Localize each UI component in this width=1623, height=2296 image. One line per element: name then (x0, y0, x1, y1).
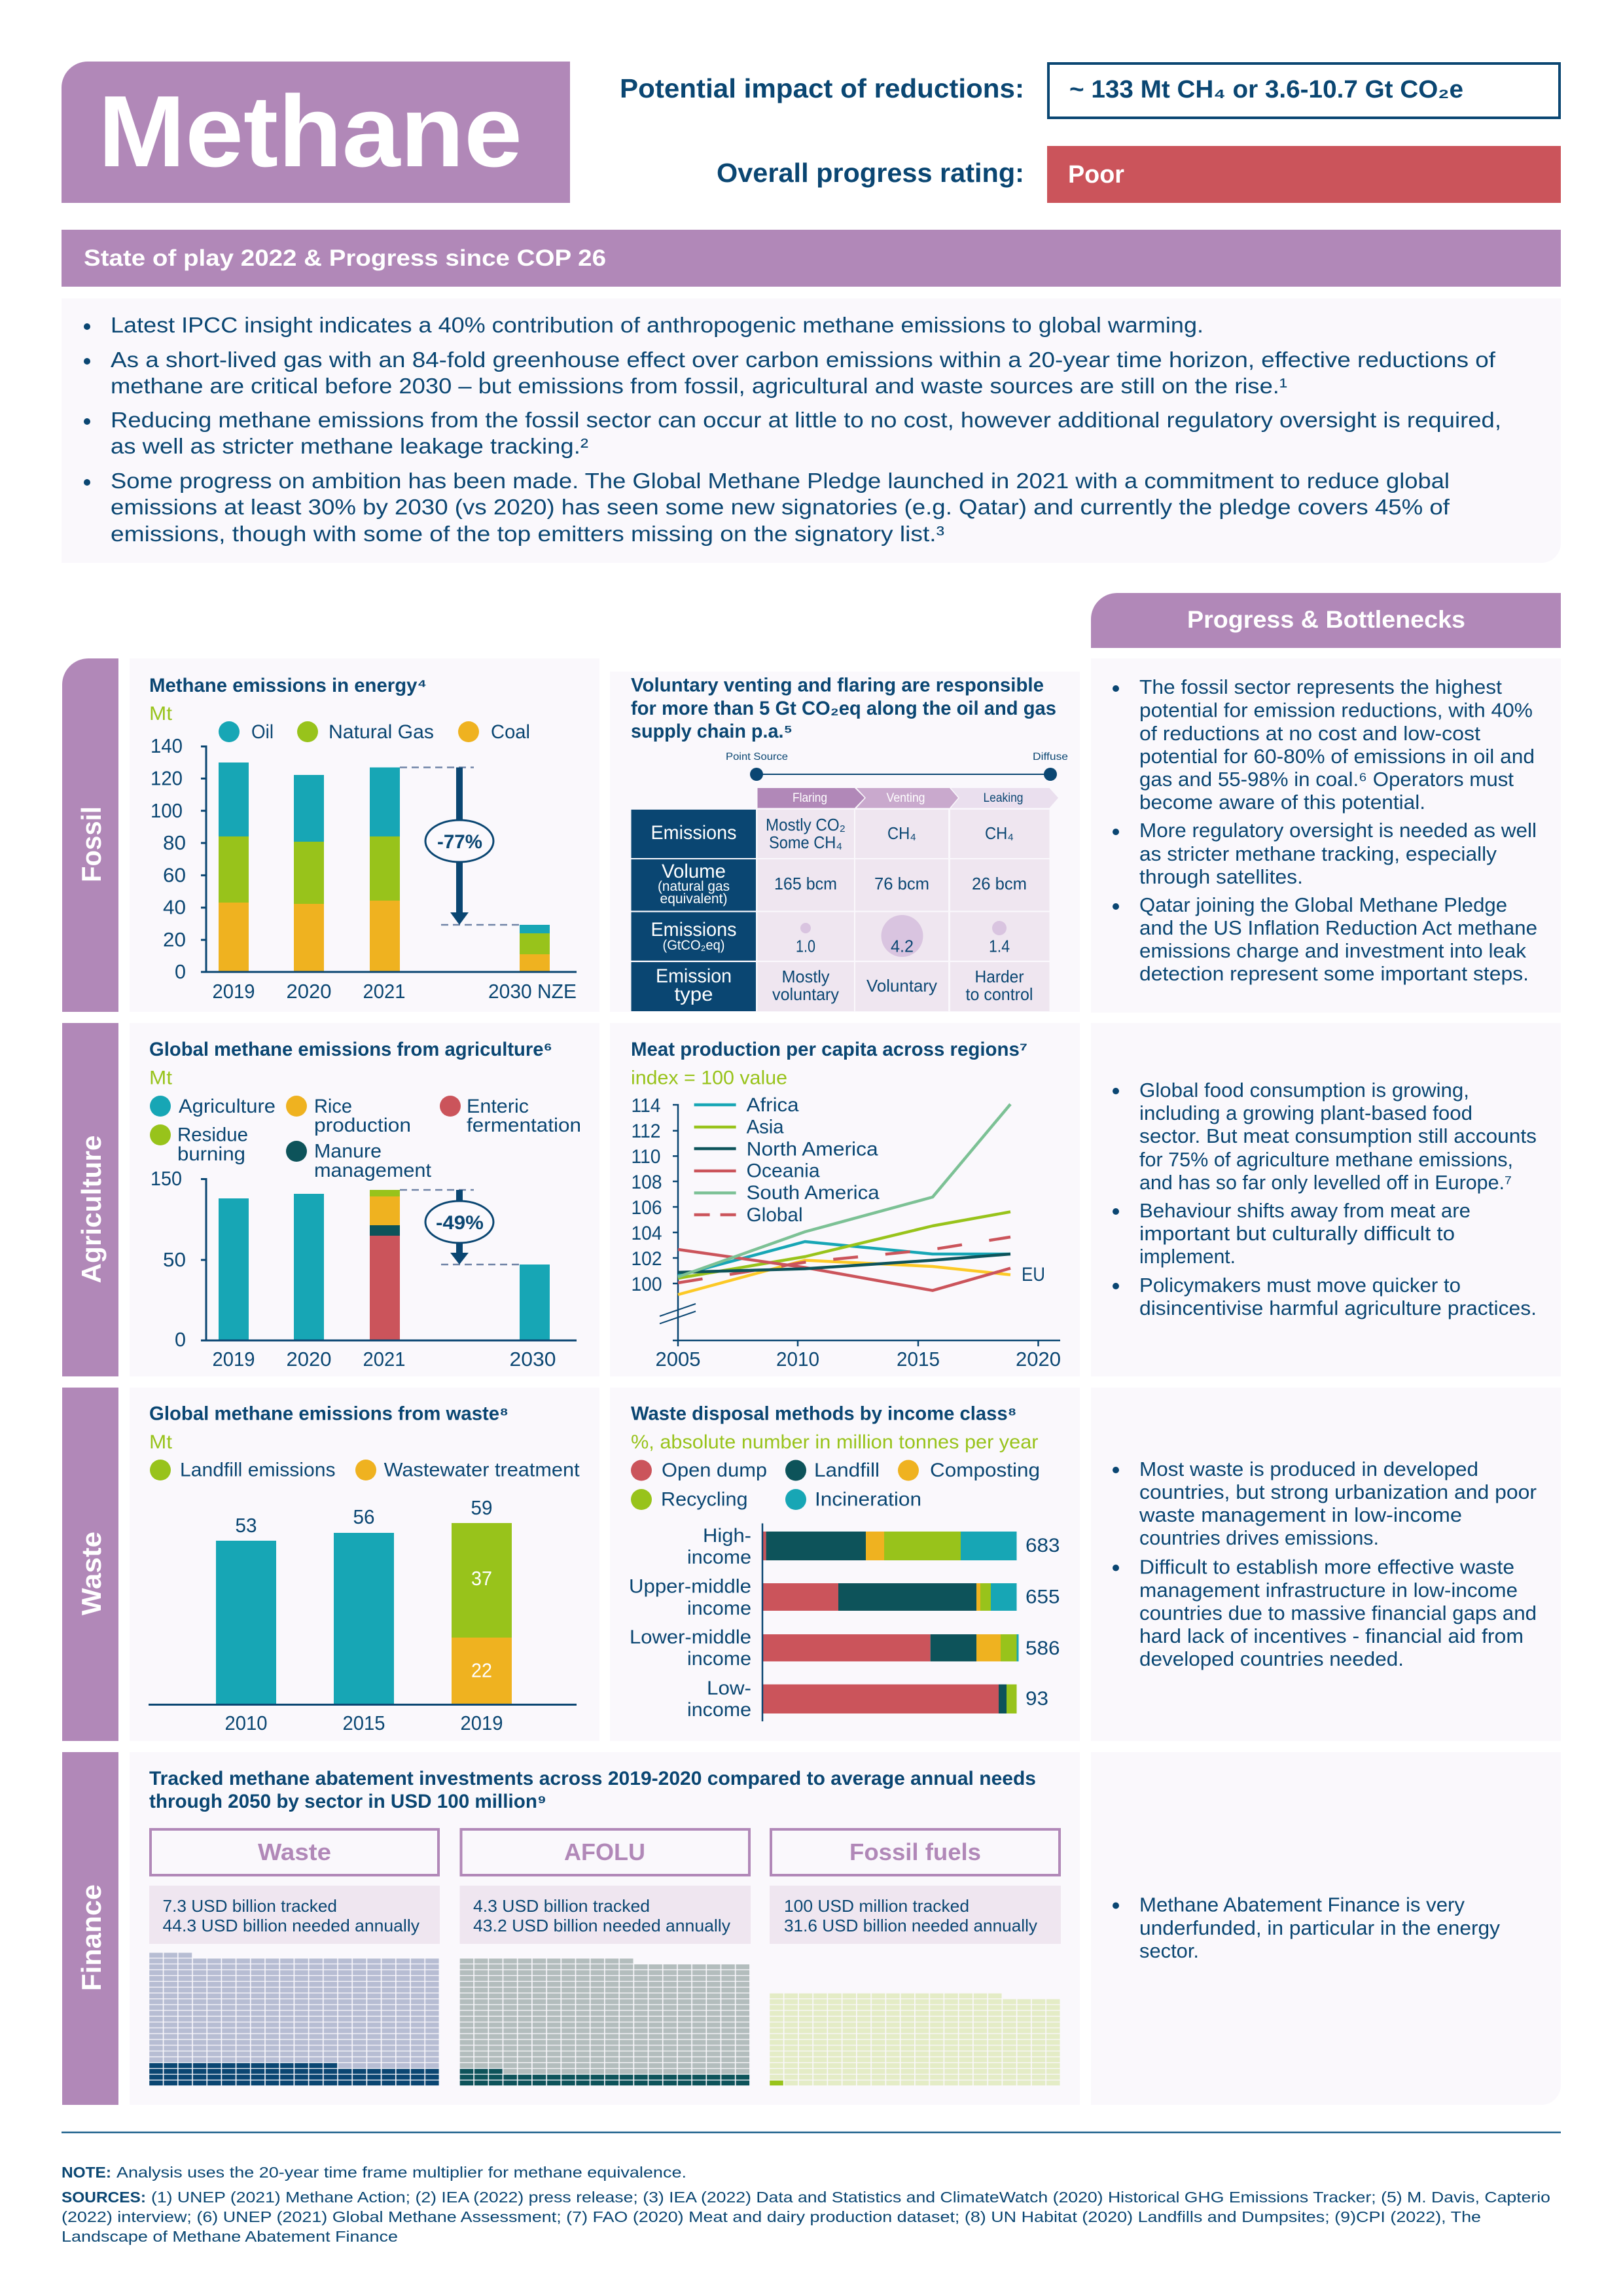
overall progress rating row: Poor (1068, 161, 1124, 188)
legend: Enteric (467, 1096, 529, 1117)
arrow: minus 49 percent (425, 1190, 493, 1265)
y axis: 0 (175, 1329, 186, 1351)
panel: waste disposal methods chart (610, 1388, 1080, 1741)
table row: emissions: Emissions (651, 822, 737, 844)
sector tab: finance: Finance (76, 1884, 107, 1991)
bar: upper-middle income: Upper-middle (629, 1576, 751, 1598)
bar: low income: income (687, 1699, 751, 1721)
y axis: 140 (151, 735, 183, 757)
column: AFOLU (459, 1829, 751, 2086)
axes: 114 (631, 1095, 661, 1117)
x axis labels: 2030 NZE (488, 980, 577, 1003)
section heading band: State of play 2022 & Progress since COP 26 (84, 245, 606, 271)
point source to diffuse scale: Point Source (726, 751, 788, 762)
bar: upper-middle income: income (687, 1598, 751, 1619)
panel: fossil progress bullets: Qatar joining the Global Methane Pledge (1139, 894, 1507, 916)
table row: volume: equivalent) (660, 891, 728, 906)
panel: agriculture emissions chart: Mt (149, 1067, 172, 1089)
axes: 2010 (776, 1348, 819, 1371)
table row: emission type: Mostly (781, 967, 830, 986)
panel: waste emissions chart: Global methane emissions from waste⁸ (149, 1403, 508, 1424)
table row: emissions: Some CH₄ (769, 833, 842, 852)
bars: 53 (236, 1515, 257, 1537)
x axis labels: 2010 (225, 1712, 267, 1734)
bars: 59 (471, 1497, 492, 1519)
legend: fermentation (467, 1115, 581, 1136)
legend: Rice (314, 1096, 352, 1117)
panel: state of play bullets: methane are critical before 2030 – but emissions from fossil, agricultural and waste sources are still on the rise.¹ (111, 374, 1287, 398)
table row: emission type: voluntary (772, 984, 839, 1004)
footnote: sources: (2022) interview; (6) UNEP (2021) Global Methane Assessment; (7) FAO (2020) Meat and dairy production dataset; (8) UN Habitat (2020) Landfills and Dumpsites; (9)CPI (2022), The (62, 2208, 1481, 2225)
panel: fossil progress bullets: gas and 55-98% in coal.⁶ Operators must (1139, 768, 1514, 791)
panel: finance progress bullets: underfunded, in particular in the energy (1139, 1917, 1501, 1939)
x axis labels: 2019 (212, 980, 255, 1003)
panel: meat production line chart: Meat production per capita across regions⁷ (631, 1039, 1027, 1060)
arrow: minus 49 percent: -49% (436, 1212, 484, 1234)
table row: emissions in GtCO2eq with bubbles: 1.0 (796, 936, 815, 956)
overall progress rating row (717, 146, 1561, 203)
panel: state of play bullets (62, 298, 1561, 563)
panel: agriculture progress bullets: implement. (1139, 1246, 1236, 1268)
legend (150, 1460, 580, 1480)
potential impact row (620, 63, 1560, 118)
y axis: 120 (151, 767, 183, 789)
panel: fossil progress bullets: become aware of this potential. (1139, 791, 1425, 814)
bar: lower-middle income: income (687, 1648, 751, 1670)
y axis: 40 (163, 897, 186, 919)
chevrons: Leaking (983, 791, 1024, 805)
legend: Coal (491, 721, 530, 743)
y axis: 20 (163, 929, 186, 951)
panel: agriculture emissions chart (130, 1023, 599, 1376)
heading: supply chain p.a.⁵ (631, 721, 793, 742)
table row: emission type: type (674, 984, 713, 1005)
legend (694, 1094, 880, 1226)
panel: state of play bullets: Some progress on ambition has been made. The Global Methane Pledge launched in 2021 with a commitment to reduce global (111, 469, 1450, 493)
panel: waste emissions chart (130, 1388, 599, 1741)
table row: emissions: CH₄ (985, 823, 1014, 843)
legend: burning (177, 1143, 245, 1165)
panel: fossil progress bullets: potential for emission reductions, with 40% (1139, 699, 1533, 721)
panel: waste disposal methods chart: %, absolute number in million tonnes per year (631, 1431, 1039, 1453)
legend: North America (747, 1139, 878, 1160)
axes: 104 (631, 1223, 662, 1244)
x axis labels: 2020 (287, 1348, 331, 1371)
table row: emissions (631, 810, 1050, 858)
panel: state of play bullets: emissions at least 30% by 2030 (vs 2020) has seen some new signatories (e.g. Qatar) and currently the pledge covers 45% of (111, 495, 1450, 519)
panel: fossil progress bullets: of reductions at no cost and low-cost (1139, 723, 1481, 745)
bar: lower-middle income: Lower-middle (630, 1626, 751, 1648)
table row: emissions in GtCO2eq with bubbles: Emissions (651, 919, 737, 941)
bar: low income: 93 (1026, 1688, 1048, 1710)
panel: waste progress bullets: developed countries needed. (1139, 1648, 1404, 1670)
column: waste (149, 1829, 440, 2086)
sector tab: waste: Waste (76, 1532, 107, 1615)
x axis labels: 2015 (343, 1712, 385, 1734)
title block: Methane (98, 75, 522, 188)
legend: Incineration (815, 1488, 921, 1511)
axes: 100 (631, 1274, 662, 1295)
panel: waste disposal methods chart: Waste disposal methods by income class⁸ (631, 1403, 1017, 1424)
table row: emission type: Harder (975, 967, 1024, 986)
point source to diffuse scale: Diffuse (1033, 751, 1068, 762)
panel: meat production line chart: index = 100 value (631, 1067, 787, 1089)
legend (150, 1096, 581, 1181)
legend: Recycling (661, 1488, 747, 1511)
y axis (151, 735, 206, 983)
panel: agriculture progress bullets: Global food consumption is growing, (1139, 1079, 1469, 1102)
bar: low income (687, 1677, 1048, 1721)
x axis labels: 2019 (461, 1712, 503, 1734)
panel: fossil progress bullets: through satellites. (1139, 866, 1303, 888)
legend: Agriculture (179, 1096, 276, 1117)
bars: 37 (471, 1568, 492, 1590)
table row: emission type: Emission (656, 965, 732, 987)
column: AFOLU: AFOLU (564, 1839, 645, 1865)
heading: progress and bottlenecks: Progress & Bottlenecks (1187, 606, 1465, 633)
panel: agriculture progress bullets: important but culturally difficult to (1139, 1223, 1455, 1245)
legend: production (314, 1115, 411, 1136)
axes: 102 (631, 1248, 662, 1270)
heading (149, 1768, 1036, 1812)
stacked bars (219, 762, 550, 972)
potential impact row: Potential impact of reductions: (620, 73, 1024, 103)
bar: low income: Low- (707, 1677, 751, 1699)
legend: Asia (747, 1117, 784, 1138)
axes: 106 (631, 1197, 662, 1219)
legend: Oceania (747, 1160, 820, 1182)
axes: 2005 (656, 1348, 700, 1371)
arrow: minus 77 percent: -77% (437, 831, 482, 853)
x axis labels: 2021 (363, 1348, 406, 1371)
panel: agriculture progress bullets: disincentivise harmful agriculture practices. (1139, 1297, 1537, 1319)
section heading band (62, 230, 1561, 287)
bars: 56 (353, 1506, 374, 1528)
column: fossil fuels (770, 1829, 1061, 2086)
heading: progress and bottlenecks (1091, 593, 1561, 648)
panel: waste progress bullets: Difficult to establish more effective waste (1139, 1556, 1514, 1579)
panel: state of play bullets: emissions, though with some of the top emitters missing on the signatory list.³ (111, 522, 944, 546)
panel: waste progress bullets: countries drives emissions. (1139, 1527, 1379, 1549)
panel: fossil progress bullets (1091, 658, 1561, 1013)
potential impact row: ~ 133 Mt CH₄ or 3.6-10.7 Gt CO₂e (1069, 76, 1463, 103)
axes: 112 (631, 1121, 661, 1142)
table row: emissions in GtCO2eq with bubbles: 4.2 (891, 936, 914, 956)
y axis (151, 1168, 206, 1351)
footnote: note: Analysis uses the 20-year time frame multiplier for methane equivalence. (116, 2164, 687, 2181)
chevrons: Flaring (793, 791, 827, 805)
y axis: 100 (151, 800, 183, 822)
bar: lower-middle income (630, 1626, 1060, 1670)
legend: Manure (314, 1141, 382, 1162)
overall progress rating row: Overall progress rating: (717, 158, 1024, 188)
panel: methane emissions in energy chart: Mt (149, 703, 172, 725)
axes: 2015 (897, 1348, 940, 1371)
legend (219, 721, 530, 743)
panel: waste progress bullets: countries due to massive financial gaps and (1139, 1602, 1537, 1624)
table row: emissions: CH₄ (887, 823, 916, 843)
bar: lower-middle income: 586 (1026, 1638, 1060, 1659)
panel: fossil progress bullets: detection represent some important steps. (1139, 963, 1529, 985)
column: waste: Waste (258, 1839, 331, 1865)
table row: emissions in GtCO2eq with bubbles: (GtCO₂eq) (662, 938, 725, 953)
table row: emission type: Voluntary (866, 976, 937, 996)
panel: fossil progress bullets: as stricter methane tracking, especially (1139, 843, 1497, 865)
sector tab: finance (62, 1752, 118, 2105)
y axis: 0 (175, 961, 186, 983)
column: fossil fuels: 31.6 USD billion needed annually (784, 1916, 1037, 1935)
arrow: minus 77 percent (425, 767, 493, 925)
footnote: note: NOTE: (62, 2164, 111, 2181)
y axis: 80 (163, 832, 186, 854)
table row: volume: 76 bcm (874, 874, 929, 893)
legend: South America (747, 1182, 880, 1204)
bar: high income: 683 (1026, 1535, 1060, 1556)
panel: finance progress bullets: sector. (1139, 1940, 1199, 1962)
panel: agriculture progress bullets: and has so far only levelled off in Europe.⁷ (1139, 1172, 1512, 1194)
table row: emission type (631, 962, 1050, 1011)
panel: finance investments waffle charts (130, 1752, 1080, 2105)
panel: agriculture progress bullets: sector. But meat consumption still accounts (1139, 1125, 1537, 1147)
panel: agriculture emissions chart: Global methane emissions from agriculture⁶ (149, 1039, 552, 1060)
data lines (678, 1104, 1010, 1295)
panel: agriculture progress bullets: Behaviour shifts away from meat are (1139, 1200, 1471, 1222)
table row: emissions in GtCO2eq with bubbles (631, 912, 1050, 961)
legend: Composting (930, 1460, 1040, 1481)
chevrons: Venting (886, 791, 925, 805)
panel: waste progress bullets: hard lack of incentives - financial aid from (1139, 1625, 1524, 1647)
axes (631, 1095, 1061, 1371)
legend: Natural Gas (329, 721, 434, 743)
panel: meat production line chart: EU (1022, 1264, 1045, 1285)
panel: fossil progress bullets: More regulatory oversight is needed as well (1139, 819, 1537, 842)
table row: volume: 165 bcm (774, 874, 837, 893)
axes: 108 (631, 1172, 662, 1193)
panel: fossil progress bullets: and the US Inflation Reduction Act methane (1139, 917, 1537, 939)
bar: high income (687, 1525, 1060, 1568)
bar: high income: High- (703, 1525, 751, 1547)
x axis labels (212, 1348, 556, 1371)
table row: volume (631, 859, 1050, 911)
panel: state of play bullets: as well as stricter methane leakage tracking.² (111, 434, 588, 458)
heading (631, 674, 1056, 742)
legend: Oil (251, 721, 274, 743)
footnote: sources: Landscape of Methane Abatement Finance (62, 2228, 398, 2245)
legend: Africa (747, 1094, 799, 1116)
sector tab: waste (62, 1388, 118, 1741)
panel: methane emissions in energy chart: Methane emissions in energy⁴ (149, 675, 427, 696)
panel: venting and flaring table (610, 672, 1080, 1012)
panel: waste progress bullets (1091, 1388, 1561, 1741)
heading: through 2050 by sector in USD 100 million⁹ (149, 1791, 546, 1812)
table row: emissions in GtCO2eq with bubbles: 1.4 (989, 936, 1010, 956)
panel: agriculture progress bullets: for 75% of agriculture methane emissions, (1139, 1149, 1513, 1171)
y axis: 60 (163, 864, 186, 886)
panel: state of play bullets: Reducing methane emissions from the fossil sector can occur at little to no cost, however additional regulatory oversight is required, (111, 408, 1501, 432)
panel: waste progress bullets: management infrastructure in low-income (1139, 1579, 1518, 1602)
heading: for more than 5 Gt CO₂eq along the oil and gas (631, 698, 1056, 719)
sector tab: fossil (62, 658, 118, 1012)
x axis labels: 2020 (287, 980, 331, 1003)
legend: Wastewater treatment (384, 1460, 580, 1480)
bar: high income: income (687, 1547, 751, 1568)
table row: volume: (natural gas (658, 879, 730, 894)
chevrons (758, 788, 1058, 808)
table row: volume: 26 bcm (972, 874, 1027, 893)
axes: 110 (631, 1146, 661, 1168)
point source to diffuse scale (726, 751, 1068, 781)
legend: Landfill emissions (180, 1460, 335, 1480)
panel: waste emissions chart: Mt (149, 1431, 172, 1453)
panel: agriculture progress bullets: including a growing plant-based food (1139, 1102, 1472, 1124)
footnote: sources: SOURCES: (62, 2189, 146, 2206)
y axis: 50 (163, 1249, 186, 1271)
panel: meat production line chart (610, 1023, 1080, 1376)
panel: agriculture progress bullets: Policymakers must move quicker to (1139, 1274, 1461, 1297)
legend (631, 1460, 1040, 1511)
legend: Global (747, 1204, 803, 1226)
column: waste: 7.3 USD billion tracked (162, 1896, 337, 1916)
legend: Open dump (662, 1460, 767, 1481)
panel: state of play bullets: As a short-lived gas with an 84-fold greenhouse effect over carbon emissions within a 20-year time horizon, effective reductions of (111, 348, 1496, 372)
x axis labels (225, 1712, 503, 1734)
x axis labels: 2021 (363, 980, 406, 1003)
legend: Landfill (814, 1460, 880, 1481)
column: waste: 44.3 USD billion needed annually (162, 1916, 419, 1935)
table row: emission type: to control (966, 984, 1033, 1004)
column: AFOLU: 43.2 USD billion needed annually (473, 1916, 730, 1935)
heading: Voluntary venting and flaring are responsible (631, 674, 1044, 696)
sector tab: agriculture (62, 1023, 118, 1376)
footnote: sources (62, 2189, 1550, 2245)
panel: fossil progress bullets: The fossil sector represents the highest (1139, 676, 1503, 698)
panel: agriculture progress bullets (1091, 1023, 1561, 1376)
panel: methane emissions in energy chart (130, 658, 599, 1012)
sector tab: fossil: Fossil (76, 806, 107, 882)
column: fossil fuels: Fossil fuels (849, 1839, 981, 1865)
footnote: sources: (1) UNEP (2021) Methane Action; (2) IEA (2022) press release; (3) IEA (2022) Data and Statistics and ClimateWatch (2020) Historical GHG Emissions Tracker; (5) M. Davis, Capterio (151, 2189, 1550, 2206)
bars (216, 1497, 512, 1704)
panel: state of play bullets: Latest IPCC insight indicates a 40% contribution of anthropogenic methane emissions to global warming. (111, 313, 1204, 337)
table row: emissions: Mostly CO₂ (766, 815, 846, 834)
panel: waste progress bullets: Most waste is produced in developed (1139, 1458, 1478, 1480)
sector tab: agriculture: Agriculture (76, 1136, 107, 1283)
column: fossil fuels: 100 USD million tracked (784, 1896, 969, 1916)
bars: 22 (471, 1660, 492, 1682)
column: AFOLU: 4.3 USD billion tracked (473, 1896, 650, 1916)
panel: waste progress bullets: waste management in low-income (1139, 1504, 1462, 1526)
table row: volume: Volume (662, 861, 726, 882)
legend: management (314, 1160, 431, 1181)
bars (219, 1190, 550, 1340)
bar: upper-middle income (629, 1576, 1060, 1619)
x axis labels (212, 980, 577, 1003)
y axis: 150 (151, 1168, 182, 1190)
panel: finance progress bullets: Methane Abatement Finance is very (1139, 1894, 1465, 1916)
panel: fossil progress bullets: emissions charge and investment into leak (1139, 940, 1527, 962)
heading: Tracked methane abatement investments across 2019-2020 compared to average annual needs (149, 1768, 1036, 1789)
x axis labels: 2030 (509, 1348, 556, 1371)
legend: Residue (177, 1124, 248, 1145)
title block (62, 62, 570, 203)
bar: upper-middle income: 655 (1026, 1587, 1060, 1608)
x axis labels: 2019 (212, 1348, 255, 1371)
panel: finance progress bullets (1091, 1752, 1561, 2105)
panel: waste progress bullets: countries, but strong urbanization and poor (1139, 1481, 1537, 1503)
panel: fossil progress bullets: potential for 60-80% of emissions in oil and (1139, 745, 1535, 768)
axes: 2020 (1016, 1348, 1061, 1371)
